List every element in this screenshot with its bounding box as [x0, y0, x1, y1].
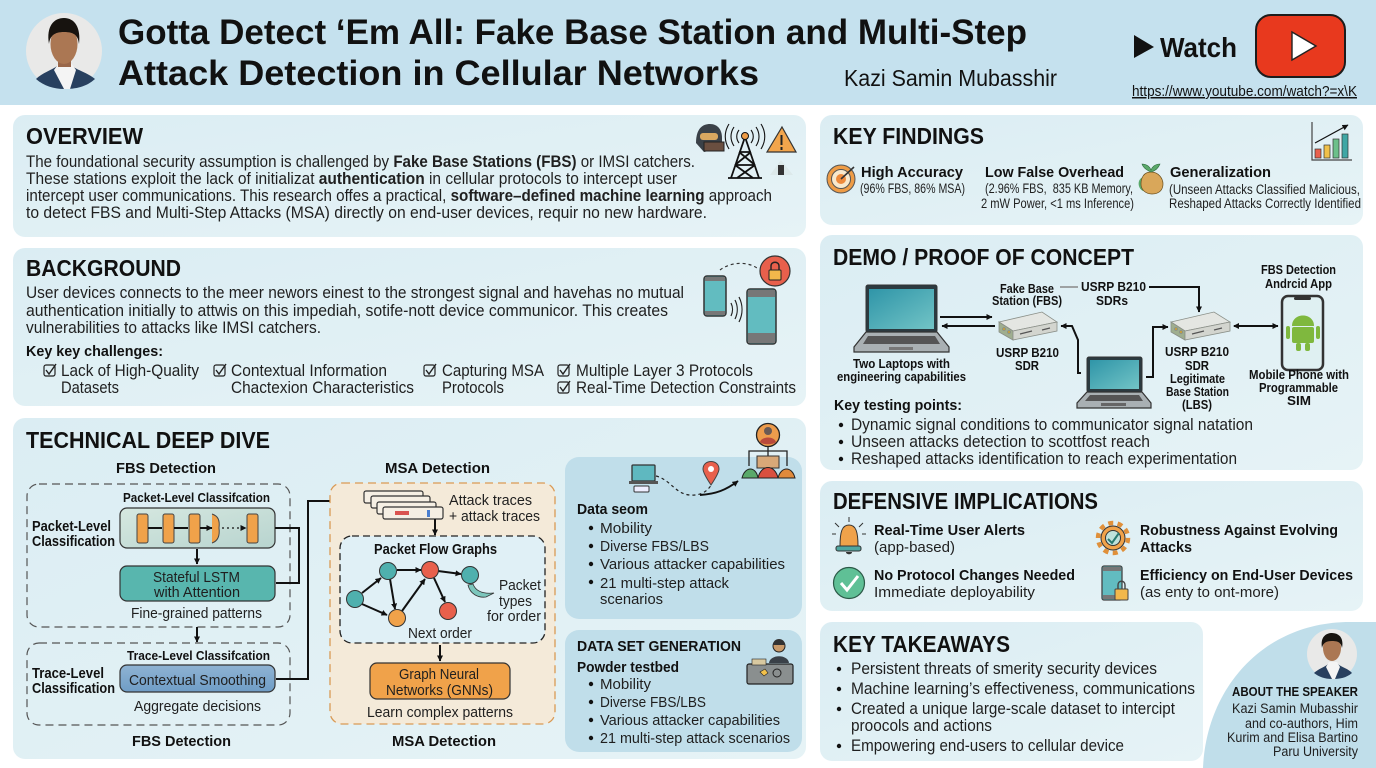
- heading: FBS detection: FBS Detection: [116, 460, 216, 477]
- takeaway list: proocols and actions: [851, 717, 992, 735]
- video URL: https://www.youtube.com/watch?=x\K: [1132, 83, 1357, 100]
- panel: key takeaways: [820, 622, 1203, 761]
- label: USRP SDRs: USRP B210: [1081, 279, 1146, 294]
- packet flow graph: for order: [487, 608, 541, 625]
- icon: alert bell: [832, 517, 866, 554]
- challenge: layer 3 and real-time: Multiple Layer 3 Protocols: [576, 362, 753, 380]
- challenge: layer 3 and real-time: Real-Time Detection Constraints: [576, 379, 796, 397]
- heading: demo: DEMO / PROOF OF CONCEPT: [833, 244, 1134, 270]
- item: robustness: [1140, 522, 1338, 556]
- overview text: to detect FBS and Multi-Step Attacks (MSA) directly on end-user devices, requir no new hardware.: [26, 204, 707, 222]
- title: Attack Detection in Cellular Networks: [118, 53, 759, 93]
- diagram: trace-level classification: Aggregate decisions: [134, 698, 261, 715]
- speaker text: Kurim and Elisa Bartino: [1227, 730, 1358, 745]
- label: two laptops: [837, 356, 966, 384]
- takeaway list: Machine learning’s effectiveness, communications: [851, 680, 1195, 698]
- panel: key findings: [820, 115, 1363, 225]
- finding: high accuracy: High Accuracy: [861, 164, 964, 181]
- panel: data seom: 21 multi-step attack: [600, 575, 729, 592]
- packet flow graph: types: [499, 593, 532, 610]
- label: mobile phone: Programmable: [1259, 380, 1338, 395]
- icon: SDR one: [999, 312, 1057, 340]
- finding: generalization: Generalization: [1170, 164, 1271, 181]
- contextual smoothing block: [120, 665, 275, 692]
- item: efficiency: [1140, 567, 1353, 601]
- packet flow graph: Packet Flow Graphs: [374, 541, 497, 558]
- heading: MSA detection: MSA Detection: [385, 460, 490, 477]
- label: fake base station: [992, 281, 1062, 308]
- arrows: laptop two to SDRs: [1061, 326, 1168, 377]
- speaker text: Paru University: [1273, 744, 1358, 759]
- heading: background: BACKGROUND: [26, 255, 181, 281]
- heading: defensive implications: DEFENSIVE IMPLICATIONS: [833, 488, 1098, 514]
- key testing points: Dynamic signal conditions to communicator signal natation: [851, 416, 1253, 434]
- overview text: The foundational security assumption is challenged by Fake Base Stations (FBS) or IMSI catchers.: [26, 153, 695, 171]
- panel: data set generation: Powder testbed: [577, 659, 679, 676]
- diagram: packet-level classification: Classification: [32, 533, 115, 550]
- icon: YouTube play button: [1256, 15, 1345, 77]
- panel: background: [13, 248, 806, 406]
- packet sequence block: [120, 508, 275, 548]
- packet flow graph: Next order: [408, 625, 472, 642]
- heading: key takeaways: KEY TAKEAWAYS: [833, 631, 1010, 657]
- GNN block: [370, 663, 510, 699]
- takeaway list: Created a unique large-scale dataset to intercipt: [851, 700, 1175, 718]
- diagram: MSA detection: [330, 483, 555, 724]
- label: detection app: FBS Detection: [1261, 262, 1336, 277]
- icon: person and hierarchy: [742, 424, 795, 478]
- label: legitimate base station: [1165, 344, 1229, 412]
- icon: money bag with leaves: [1139, 164, 1163, 194]
- panel: data seom: Diverse FBS/LBS: [600, 538, 709, 555]
- heading: technical deep dive: TECHNICAL DEEP DIVE: [26, 427, 270, 453]
- finding: generalization: [1169, 164, 1361, 211]
- item: no protocol changes: Immediate deployability: [874, 584, 1035, 601]
- speaker portrait small: [1307, 629, 1357, 679]
- speaker text: and co-authors, Him: [1245, 716, 1358, 731]
- challenge: contextual information: [214, 362, 414, 397]
- finding: low false overhead: [981, 164, 1134, 211]
- label: USRP SDR: [996, 345, 1059, 373]
- icon: laptop one: [854, 285, 949, 352]
- item: efficiency: Efficiency on End-User Devices: [1140, 567, 1353, 584]
- arrow: packet to trace: [196, 627, 198, 642]
- key testing points: Unseen attacks detection to scottfost reach: [851, 433, 1150, 451]
- icon: phone with lock: [1102, 566, 1128, 600]
- panel: technical deep dive: [13, 418, 806, 759]
- panel: about the speaker: [1203, 622, 1376, 768]
- label: mobile phone: [1249, 367, 1349, 408]
- item: real-time alerts: Real-Time User Alerts: [874, 522, 1025, 539]
- label: legitimate base station: Base Station: [1166, 384, 1229, 399]
- icon: green check: [834, 568, 864, 598]
- overview text: [26, 153, 772, 222]
- background text: authentication initially to attwis on this impediah, sotife-nott device communicor. This creates: [26, 302, 668, 320]
- arrows: laptop to FBS SDR: [940, 317, 995, 326]
- label: USRP SDR: SDR: [1015, 358, 1040, 373]
- panel: data seom: scenarios: [600, 591, 663, 608]
- label: detection app: [1261, 262, 1336, 291]
- panel: data seom: Various attacker capabilities: [600, 556, 785, 573]
- GNN block: Graph Neural: [399, 666, 479, 683]
- label: legitimate base station: Legitimate: [1170, 371, 1225, 386]
- takeaway list: [837, 660, 1195, 755]
- diagram: packet-level classification: Packet-Level Classifcation: [123, 490, 270, 505]
- challenge: datasets: Datasets: [61, 379, 119, 397]
- panel: data set generation: [565, 630, 802, 752]
- label: legitimate base station: SDR: [1185, 358, 1210, 373]
- item: no protocol changes: No Protocol Changes Needed: [874, 567, 1075, 584]
- heading: key findings: KEY FINDINGS: [833, 123, 984, 149]
- panel: demo / proof of concept: [820, 235, 1363, 470]
- background text: User devices connects to the meer newors einest to the strongest signal and havehas no mutual: [26, 284, 684, 302]
- label: two laptops: Two Laptops with: [853, 356, 950, 371]
- contextual smoothing block: Contextual Smoothing: [129, 672, 266, 689]
- panel: data set generation: Various attacker capabilities: [600, 712, 780, 729]
- icon: target: [827, 165, 855, 193]
- background text: [26, 284, 684, 337]
- item: real-time alerts: [874, 522, 1025, 556]
- diagram: MSA detection: Learn complex patterns: [367, 704, 513, 721]
- diagram: packet-level classification: Packet-Level: [32, 518, 111, 535]
- icon: android phone: [1282, 296, 1323, 370]
- challenge: capturing MSA: [424, 362, 544, 397]
- finding: low false overhead: 2 mW Power, <1 ms Inference): [981, 196, 1134, 211]
- diagram: trace-level classification: Trace-Level Classifcation: [127, 648, 270, 663]
- speaker text: Kazi Samin Mubasshir: [1232, 701, 1358, 716]
- challenge: layer 3 and real-time: [558, 362, 796, 397]
- panel: data seom: Mobility: [600, 520, 652, 537]
- panel: data set generation: 21 multi-step attack scenarios: [600, 730, 790, 747]
- panel: data set generation: DATA SET GENERATION: [577, 638, 741, 655]
- diagram: packet-level classification: [27, 484, 299, 627]
- challenge: capturing MSA: Protocols: [442, 379, 504, 397]
- label: fake base station: Station (FBS): [992, 293, 1062, 308]
- item: efficiency: (as enty to ont-more): [1140, 584, 1279, 601]
- diagram: trace-level classification: Trace-Level: [32, 665, 104, 682]
- caption: FBS detection: FBS Detection: [132, 733, 231, 750]
- arrow: to legitimate SDR: [1060, 287, 1199, 312]
- background text: vulnerabilities to attacks like IMSI catchers.: [26, 319, 321, 337]
- LSTM block: Stateful LSTM: [153, 569, 240, 586]
- panel: defensive implications: [820, 481, 1363, 611]
- key testing points: Key testing points:: [834, 397, 962, 414]
- label: legitimate base station: USRP B210: [1165, 344, 1229, 359]
- takeaway list: Persistent threats of smerity security devices: [851, 660, 1157, 678]
- finding: low false overhead: (2.96% FBS, 835 KB Memory,: [985, 181, 1133, 196]
- title: Gotta Detect ‘Em All: Fake Base Station and Multi-Step: [118, 12, 1027, 52]
- label: USRP SDRs: [1081, 279, 1146, 308]
- subheading: key challenges: Key key challenges:: [26, 343, 163, 360]
- packet flow graph: [340, 536, 545, 643]
- panel: data set generation: Mobility: [600, 676, 651, 693]
- header band: [0, 0, 1376, 105]
- label: legitimate base station: (LBS): [1182, 397, 1212, 412]
- packet flow graph: Packet: [499, 577, 542, 594]
- diagram: trace-level classification: [27, 643, 290, 725]
- challenge: contextual information: Contextual Information: [231, 362, 387, 380]
- challenge: contextual information: Chactexion Characteristics: [231, 379, 414, 397]
- title: [118, 12, 1027, 93]
- panel: overview: [13, 115, 806, 237]
- label: fake base station: Fake Base: [1000, 281, 1054, 296]
- item: robustness: Robustness Against Evolving: [1140, 522, 1338, 539]
- diagram: packet-level classification: Fine-grained patterns: [131, 605, 262, 622]
- speaker text: [1227, 684, 1359, 759]
- icon: SDR two: [1171, 312, 1230, 340]
- text: attack traces: Attack traces: [449, 492, 532, 509]
- arrow: SDR to phone: [1234, 325, 1278, 327]
- label: mobile phone: SIM: [1287, 393, 1311, 408]
- heading: overview: OVERVIEW: [26, 123, 143, 149]
- GNN block: Networks (GNNs): [386, 682, 493, 699]
- panel: data seom: [565, 457, 802, 619]
- finding: high accuracy: [860, 164, 965, 196]
- text: attack traces: [449, 492, 540, 525]
- speaker portrait: [26, 13, 102, 89]
- icon: engineer at workbench: [747, 639, 793, 684]
- watch label: Watch: [1160, 32, 1237, 63]
- LSTM block: with Attention: [153, 584, 240, 601]
- text: attack traces: + attack traces: [449, 508, 540, 525]
- item: no protocol changes: [874, 567, 1075, 601]
- finding: low false overhead: Low False Overhead: [985, 164, 1124, 181]
- diagram: trace-level classification: Classification: [32, 680, 115, 697]
- panel: data seom: Data seom: [577, 501, 648, 518]
- icon: growth chart: [1312, 122, 1352, 160]
- LSTM block: [120, 566, 275, 601]
- challenge: datasets: [44, 362, 200, 397]
- arrow: FBS to MSA: [276, 501, 358, 679]
- key testing points: Reshaped attacks identification to reach experimentation: [851, 450, 1237, 468]
- icon: phones with lock: [704, 256, 790, 344]
- label: mobile phone: Mobile Phone with: [1249, 367, 1349, 382]
- item: robustness: Attacks: [1140, 539, 1192, 556]
- overview text: These stations exploit the lack of initializat authentication in cellular protocols to intercept user: [26, 170, 678, 188]
- icon: laptop two: [1077, 357, 1151, 408]
- icon: hacker, tower and warning: [696, 124, 796, 178]
- speaker text: ABOUT THE SPEAKER: [1232, 684, 1359, 699]
- overview text: intercept user communications. This research offes a practical, software–defined machine learning approach: [26, 187, 772, 205]
- icon: laptop, pin and route: [629, 462, 738, 495]
- icon: attack trace stack: [364, 491, 443, 519]
- label: detection app: Andrcid App: [1265, 276, 1332, 291]
- item: real-time alerts: (app-based): [874, 539, 955, 556]
- caption: MSA detection: MSA Detection: [392, 733, 496, 750]
- icon: gear with check: [1098, 523, 1128, 553]
- challenge: datasets: Lack of High-Quality: [61, 362, 200, 380]
- label: USRP SDR: USRP B210: [996, 345, 1059, 360]
- key testing points: [834, 397, 1253, 468]
- finding: high accuracy: (96% FBS, 86% MSA): [860, 181, 965, 196]
- label: USRP SDRs: SDRs: [1096, 293, 1128, 308]
- label: two laptops: engineering capabilities: [837, 369, 966, 384]
- panel: data set generation: Diverse FBS/LBS: [600, 694, 706, 711]
- takeaway list: Empowering end-users to cellular device: [851, 737, 1124, 755]
- author: Kazi Samin Mubasshir: [844, 65, 1057, 91]
- challenge: capturing MSA: Capturing MSA: [442, 362, 544, 380]
